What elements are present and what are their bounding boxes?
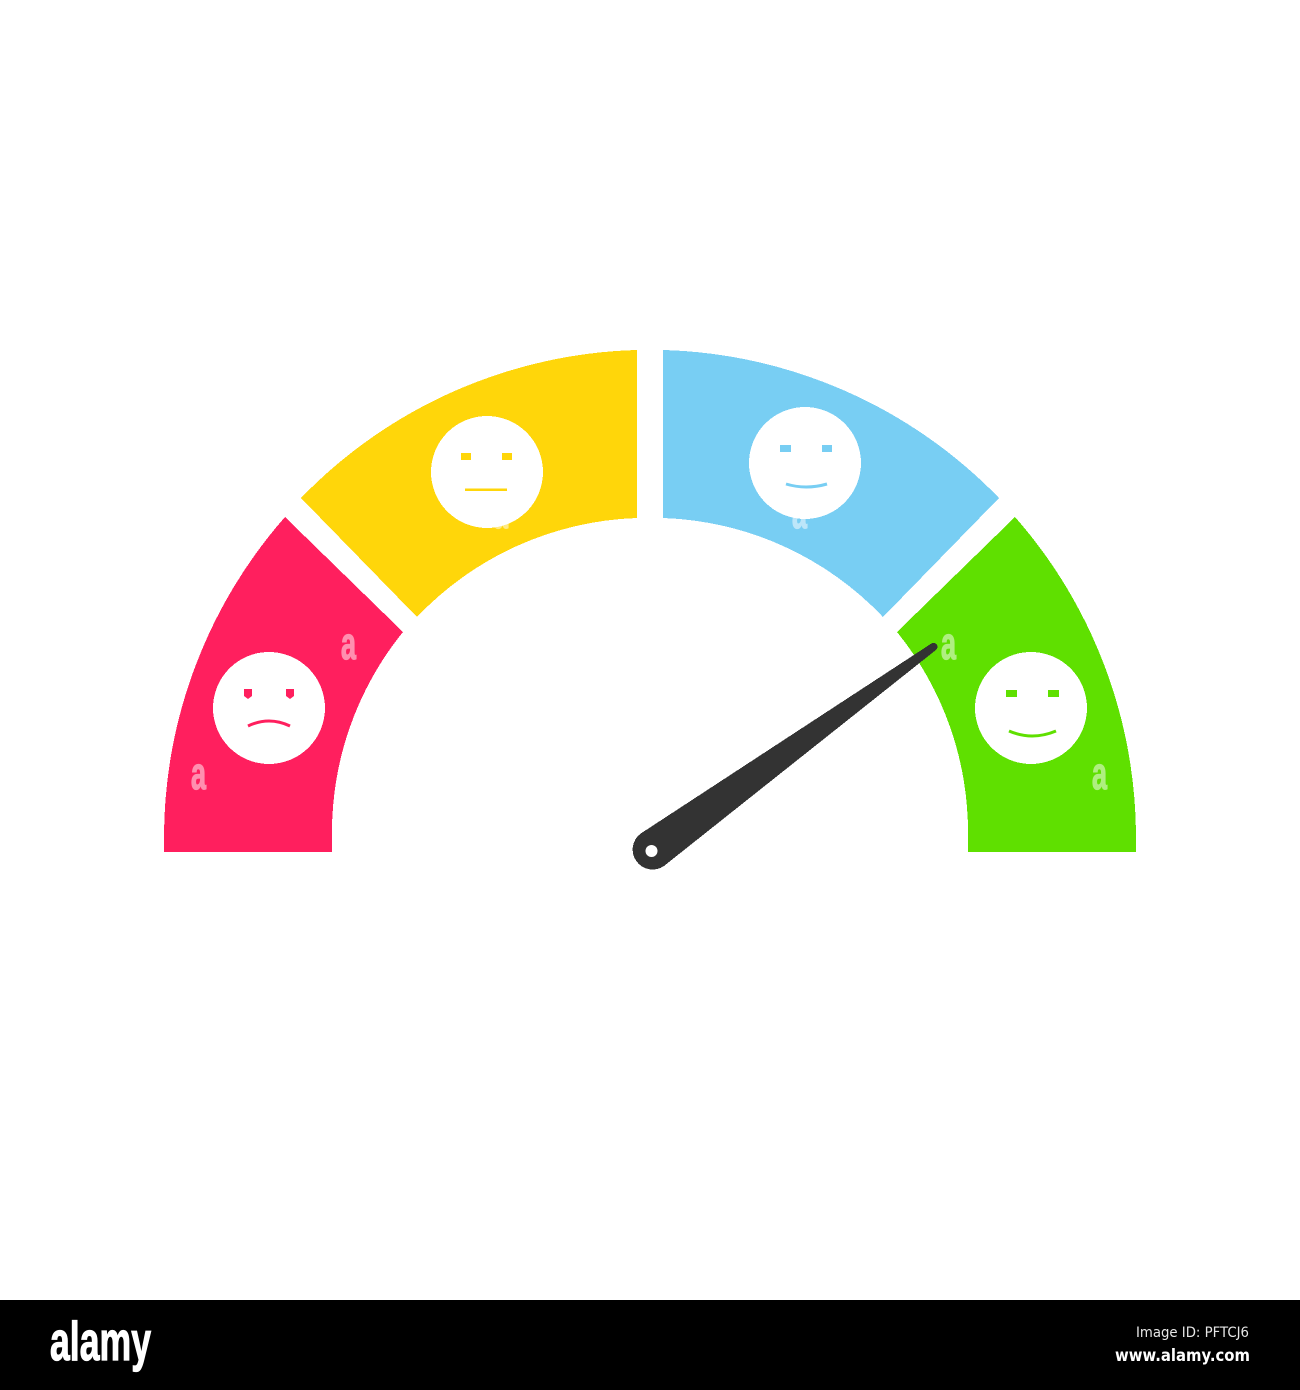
arrow: gauge needle [633,643,937,870]
panel: gauge [164,350,1136,852]
segment: red, unhappy: a [191,748,207,799]
segment: green, happy: a [941,618,957,669]
text: website: www.alamy.com [1115,1346,1250,1366]
segment: blue, content: a [792,487,808,538]
segment: yellow, neutral: a [493,487,509,538]
logo: alamy: alamy [50,1310,151,1372]
footer: watermark bar [0,1300,1300,1390]
text: image ID: Image ID: PFTCJ6 [1136,1325,1249,1341]
segment: blue, content [663,350,999,617]
segment: red, unhappy [164,517,403,852]
segment: green, happy: a [1092,748,1108,799]
segment: green, happy [897,517,1136,852]
segment: red, unhappy: a [341,618,357,669]
segment: yellow, neutral [301,350,637,617]
